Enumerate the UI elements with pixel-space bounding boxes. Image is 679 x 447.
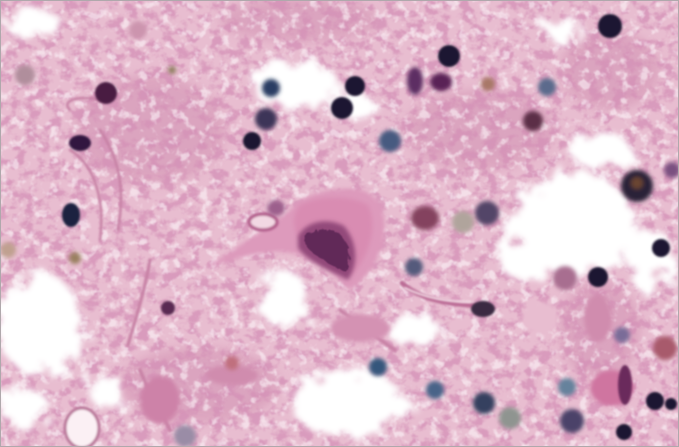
nuclei: purple brown xyxy=(0,21,679,370)
satellite cell and fibres xyxy=(65,98,480,447)
neuron nucleus xyxy=(298,221,355,280)
large pink cells xyxy=(140,294,634,424)
neuron body xyxy=(205,189,385,290)
nuclei: blue grey out of focus xyxy=(15,65,630,447)
